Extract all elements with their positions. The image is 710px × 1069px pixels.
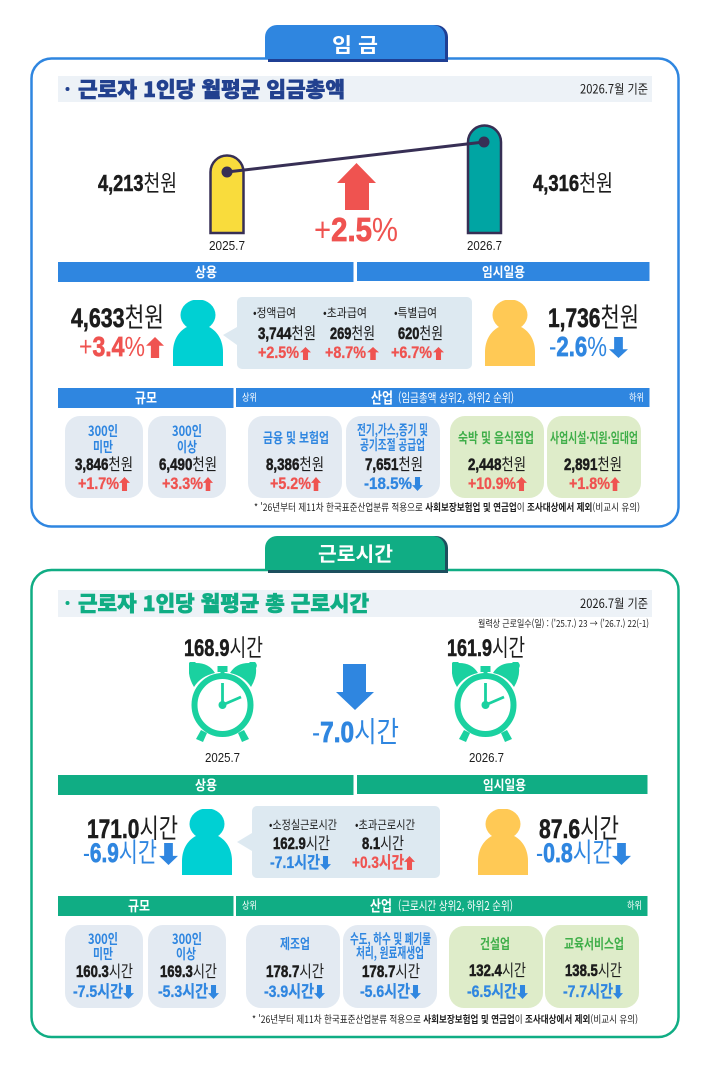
card: utilities bbox=[346, 416, 440, 498]
card: water and waste bbox=[343, 925, 437, 1008]
header: regular: 상용 bbox=[195, 261, 217, 281]
header: temporary bbox=[357, 774, 648, 794]
card: utilities: -18.5% bbox=[364, 475, 412, 493]
card: finance: 8,386천원 bbox=[266, 451, 324, 475]
bubble: pay components: +6.7% bbox=[391, 344, 432, 362]
header: industry: 상위 bbox=[242, 389, 257, 404]
card: 300 or more: 6,490천원 bbox=[159, 451, 217, 475]
header: regular bbox=[58, 261, 354, 282]
bubble: hour components: •초과근로시간 bbox=[355, 816, 415, 833]
card: education: 교육서비스업 bbox=[564, 934, 624, 954]
card: lodging: 2,448천원 bbox=[468, 451, 526, 475]
bubble: hour components: 162.9시간 bbox=[273, 830, 330, 854]
card: under 300: +1.7% bbox=[78, 475, 119, 493]
regular worker total: 4,633천원 bbox=[71, 296, 164, 335]
arrow: down bbox=[336, 664, 374, 710]
header: industry: (임금총액 상위2, 하위2 순위) bbox=[398, 389, 514, 406]
bubble: hour components bbox=[237, 806, 440, 878]
card: 300 or more: 300인 bbox=[172, 929, 202, 949]
card: 300 or more: 이상 bbox=[177, 437, 197, 457]
bubble: pay components: 269천원 bbox=[330, 320, 375, 344]
regular worker hours: 171.0시간 bbox=[87, 807, 178, 846]
bubble: pay components: •정액급여 bbox=[253, 304, 296, 321]
card: construction: -6.5시간 bbox=[467, 978, 517, 1002]
header: regular: 상용 bbox=[195, 774, 217, 794]
card: finance bbox=[248, 416, 342, 498]
bar chart: wage comparison bbox=[209, 126, 502, 253]
bubble: pay components: 620천원 bbox=[398, 320, 443, 344]
temporary worker hours: 87.6시간 bbox=[539, 807, 619, 846]
tab heading: wages bbox=[265, 25, 448, 62]
card: utilities: 공기조절 공급업 bbox=[360, 435, 425, 455]
card: lodging: +10.9% bbox=[468, 475, 516, 493]
regular worker total: +3.4% bbox=[79, 331, 145, 362]
header: industry bbox=[236, 895, 648, 916]
header: industry: 산업 bbox=[370, 895, 392, 916]
icon: clock 2026.7 bbox=[451, 661, 520, 742]
bubble: pay components: •특별급여 bbox=[394, 304, 437, 321]
card: under 300 bbox=[65, 416, 143, 498]
card: business support: 2,891천원 bbox=[564, 451, 622, 475]
header: temporary: 임시일용 bbox=[482, 261, 525, 281]
bubble: hour components: +0.3시간 bbox=[352, 849, 404, 873]
card: manufacturing: -3.9시간 bbox=[264, 978, 314, 1002]
footnote: hours: * '26년부터 제11차 한국표준산업분류 적용으로 사회보장보험업 및 연금업이 조사대상에서 제외(비교시 유의) bbox=[252, 1011, 638, 1026]
section title band: hours bbox=[58, 588, 652, 618]
regular worker total bbox=[71, 296, 164, 362]
header: industry: 산업 bbox=[371, 387, 393, 408]
card: finance: +5.2% bbox=[270, 475, 311, 493]
temporary worker hours: -0.8시간 bbox=[536, 831, 612, 870]
icon: temporary worker bbox=[478, 808, 528, 875]
card: water and waste: 처리, 원료재생업 bbox=[356, 943, 424, 963]
card: under 300: 300인 bbox=[88, 421, 118, 441]
card: education: 138.5시간 bbox=[565, 957, 622, 981]
value: 2026.7 hours: 161.9시간 bbox=[447, 628, 525, 663]
card: under 300: 미만 bbox=[93, 437, 113, 457]
header: size: 규모 bbox=[135, 388, 157, 408]
card: education: -7.7시간 bbox=[563, 978, 613, 1002]
card: under 300: 300인 bbox=[88, 929, 118, 949]
card: utilities: 전기,가스,증기 및 bbox=[357, 420, 428, 440]
header: industry: 상위 bbox=[242, 897, 257, 912]
card: under 300: 3,846천원 bbox=[75, 451, 133, 475]
bar chart: wage comparison: 2025.7 bbox=[209, 238, 245, 253]
temporary worker total: -2.6% bbox=[549, 331, 607, 362]
tab heading: working hours: 근로시간 bbox=[318, 538, 393, 567]
value: 2025.7 wage: 4,213천원 bbox=[98, 164, 177, 198]
card: construction bbox=[449, 926, 543, 1008]
temporary worker hours bbox=[536, 807, 631, 870]
card: under 300: 160.3시간 bbox=[76, 958, 133, 982]
card: 300 or more bbox=[148, 925, 226, 1008]
card: utilities: 7,651천원 bbox=[365, 451, 423, 475]
header: industry: 하위 bbox=[627, 897, 642, 912]
section title band: wages: 근로자 1인당 월평균 임금총액 bbox=[78, 74, 345, 104]
temporary worker total: 1,736천원 bbox=[548, 296, 639, 335]
tab heading: working hours bbox=[265, 536, 448, 573]
card: education bbox=[545, 925, 639, 1008]
card: manufacturing bbox=[246, 925, 340, 1008]
header: industry bbox=[236, 387, 650, 408]
card: under 300: -7.5시간 bbox=[73, 978, 123, 1002]
bubble: pay components: +8.7% bbox=[325, 344, 366, 362]
change: -7.0 hours: -7.0시간 bbox=[312, 709, 399, 751]
header: industry: 하위 bbox=[629, 389, 644, 404]
card: under 300 bbox=[65, 925, 143, 1008]
bubble: pay components: +2.5% bbox=[258, 344, 299, 362]
header: size bbox=[58, 388, 234, 408]
value: 2026.7 wage: 4,316천원 bbox=[533, 164, 613, 198]
arrow: up bbox=[337, 163, 376, 210]
card: 300 or more: 이상 bbox=[176, 944, 196, 964]
card: 300 or more: 169.3시간 bbox=[160, 958, 217, 982]
card: 300 or more bbox=[148, 416, 226, 498]
card: business support: +1.8% bbox=[569, 475, 610, 493]
section title band: wages: 2026.7월 기준 bbox=[580, 78, 648, 98]
label: 2026.7: 2026.7 bbox=[469, 750, 504, 765]
regular worker hours: -6.9시간 bbox=[83, 831, 157, 870]
note: working days: 월력상 근로일수(일) : ('25.7.) 23 → ('26.7.) 22(-1) bbox=[478, 616, 649, 630]
bubble: hour components: 8.1시간 bbox=[362, 830, 404, 854]
header: temporary bbox=[357, 261, 650, 281]
icon: regular worker bbox=[173, 300, 223, 366]
card: lodging bbox=[450, 416, 544, 498]
card: water and waste: 수도, 하수 및 폐기물 bbox=[350, 929, 431, 949]
card: business support: 사업시설·지원·임대업 bbox=[550, 428, 638, 448]
change: +2.5%: +2.5% bbox=[314, 211, 398, 248]
bubble: pay components: 3,744천원 bbox=[258, 320, 316, 344]
section title band: wages bbox=[58, 74, 652, 104]
card: construction: 132.4시간 bbox=[469, 957, 526, 981]
card: 300 or more: +3.3% bbox=[162, 475, 203, 493]
icon: regular worker bbox=[182, 808, 232, 875]
card: 300 or more: 300인 bbox=[172, 421, 202, 441]
header: temporary: 임시일용 bbox=[483, 774, 526, 794]
icon: clock 2025.7 bbox=[188, 661, 257, 742]
value: 2025.7 hours: 168.9시간 bbox=[184, 628, 263, 663]
card: manufacturing: 178.7시간 bbox=[266, 958, 324, 982]
card: manufacturing: 제조업 bbox=[280, 934, 310, 954]
temporary worker total bbox=[548, 296, 639, 362]
section title band: hours: 근로자 1인당 월평균 총 근로시간 bbox=[78, 588, 369, 618]
card: lodging: 숙박 및 음식점업 bbox=[458, 428, 534, 448]
bubble: hour components: •소정실근로시간 bbox=[269, 816, 337, 833]
card: under 300: 미만 bbox=[93, 944, 113, 964]
bar chart: wage comparison: 2026.7 bbox=[467, 238, 502, 253]
header: regular bbox=[58, 774, 354, 795]
card: business support bbox=[547, 416, 641, 498]
bubble: pay components bbox=[223, 297, 472, 369]
label: 2025.7: 2025.7 bbox=[205, 750, 240, 765]
card: construction: 건설업 bbox=[480, 934, 510, 954]
header: size: 규모 bbox=[128, 896, 150, 916]
bubble: hour components: -7.1시간 bbox=[270, 849, 320, 873]
card: finance: 금융 및 보험업 bbox=[263, 428, 329, 448]
card: water and waste: -5.6시간 bbox=[360, 978, 410, 1002]
bubble: pay components: •초과급여 bbox=[323, 304, 367, 321]
panel: working hours bbox=[32, 536, 678, 1037]
card: water and waste: 178.7시간 bbox=[362, 958, 420, 982]
header: size bbox=[58, 896, 234, 916]
icon: temporary worker bbox=[485, 300, 535, 366]
tab heading: wages: 임 금 bbox=[332, 29, 378, 58]
panel: wages bbox=[32, 25, 678, 526]
header: industry: (근로시간 상위2, 하위2 순위) bbox=[398, 897, 513, 914]
section title band: hours: 2026.7월 기준 bbox=[580, 593, 648, 612]
regular worker hours bbox=[83, 807, 178, 870]
footnote: wages: * '26년부터 제11차 한국표준산업분류 적용으로 사회보장보험업 및 연금업이 조사대상에서 제외(비교시 유의) bbox=[254, 499, 640, 514]
card: 300 or more: -5.3시간 bbox=[158, 978, 208, 1002]
